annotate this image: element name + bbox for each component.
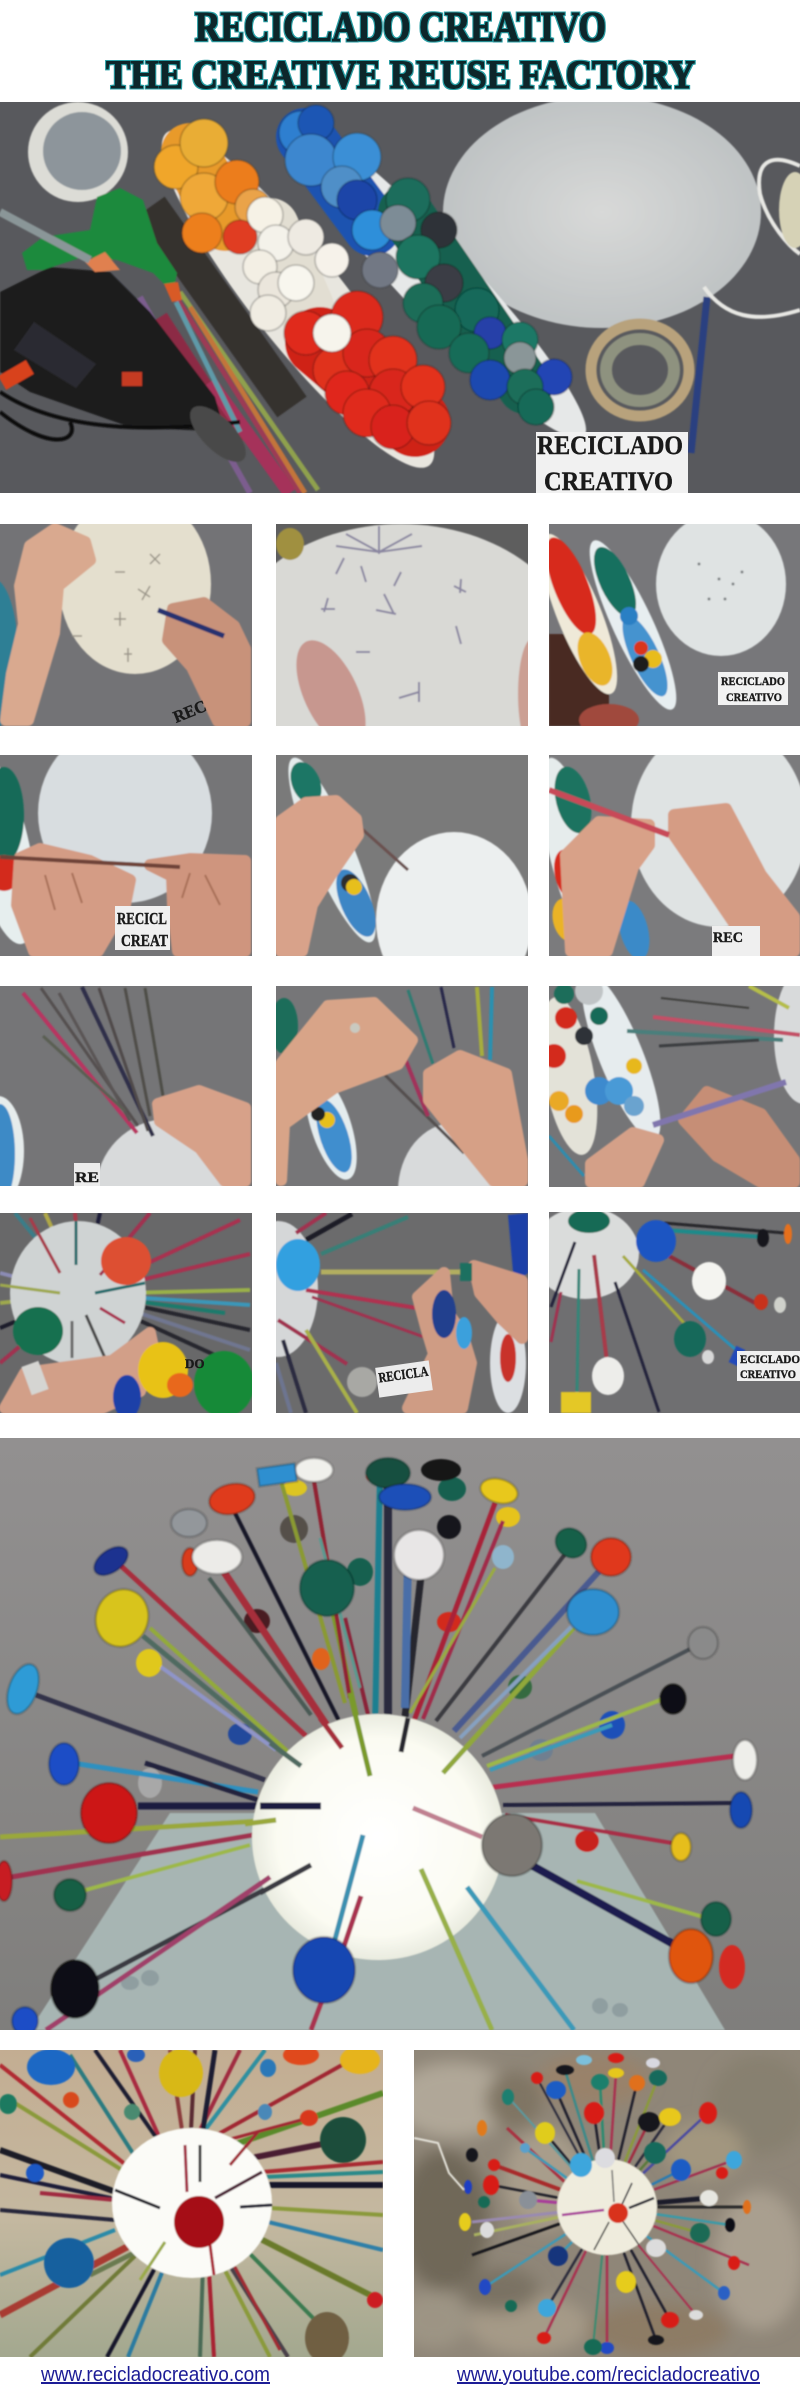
label card: RECICL	[117, 909, 167, 928]
title line 1: RECICLADO CREATIVO	[195, 5, 606, 51]
light blue cap on finger	[456, 1317, 472, 1349]
caps on boat	[0, 767, 24, 891]
skewer	[352, 820, 408, 870]
yellow cap	[276, 528, 304, 560]
label card	[718, 672, 788, 705]
skewers	[0, 2050, 383, 2357]
marked sphere	[59, 494, 211, 674]
blue and green boat	[576, 532, 690, 718]
grey cap	[347, 1367, 377, 1397]
red and yellow boat	[526, 526, 632, 702]
power plug	[779, 172, 800, 248]
boat edge	[0, 750, 49, 950]
dishes with caps	[530, 964, 675, 1159]
sphere with holes	[656, 512, 786, 656]
bottom photo: lamp lit from below	[0, 2050, 383, 2357]
step 1: marking the sphere	[0, 524, 252, 727]
sphere	[398, 1123, 510, 1259]
step 5: inserting skewer	[276, 755, 528, 956]
link: youtube: www.youtube.com/recicladocreativo	[456, 2364, 760, 2386]
blue cap	[636, 1220, 676, 1262]
sphere	[631, 723, 800, 927]
dark skewers	[150, 207, 292, 407]
step 12: caps attached	[549, 1212, 800, 1413]
white cable	[704, 160, 800, 317]
stubs on sphere	[0, 1218, 145, 1358]
label card: REC	[713, 930, 743, 946]
marks on sphere	[72, 554, 160, 662]
skewers on sphere	[115, 2132, 272, 2280]
boat edge	[0, 578, 18, 730]
bottle caps	[0, 1458, 757, 2035]
label card: CREAT	[121, 931, 169, 950]
boat	[527, 752, 655, 962]
boat	[274, 750, 390, 950]
right hand	[684, 1092, 794, 1182]
blue strip top right	[508, 1213, 528, 1283]
sphere	[443, 96, 761, 328]
step 3: pierced sphere	[549, 524, 800, 726]
step 11: hands with caps	[276, 1213, 528, 1413]
label card: RE	[75, 1170, 99, 1186]
title	[106, 5, 695, 97]
boat dish left	[131, 104, 465, 494]
green glue gun	[194, 1351, 254, 1417]
label card: RECICLADO	[721, 674, 785, 688]
drill	[0, 267, 255, 471]
blue cap	[113, 1375, 141, 1419]
skewers	[276, 1213, 464, 1413]
step 8: hands adding skewers	[276, 986, 528, 1186]
green cap on boat	[270, 998, 298, 1054]
step 4: hands threading skewer	[0, 755, 252, 956]
dish at right	[490, 1313, 526, 1413]
cable tube	[0, 212, 90, 260]
photo: materials	[0, 102, 800, 496]
label card	[712, 926, 760, 956]
boat dish right	[258, 95, 610, 461]
table feet	[121, 1970, 628, 2017]
step 7: many skewers inserted	[0, 986, 252, 1186]
label card: RECICLA	[378, 1365, 430, 1386]
caps	[0, 2045, 383, 2364]
label card: RECICLADO	[537, 431, 683, 460]
white sphere	[557, 2159, 657, 2255]
left hand	[17, 849, 130, 951]
sphere	[531, 1207, 639, 1299]
skewers	[0, 1213, 250, 1363]
label: DO	[185, 1356, 204, 1371]
label card	[375, 1360, 433, 1398]
step 2: close-up of marks	[276, 524, 528, 726]
boat	[295, 1067, 367, 1185]
glass table	[30, 1813, 725, 2030]
tape roll	[591, 324, 689, 416]
label card: CREATIVO	[726, 690, 782, 704]
sphere	[38, 723, 212, 903]
label card	[737, 1351, 800, 1381]
red skewer	[549, 790, 669, 835]
small caps	[702, 1224, 792, 1366]
white cap	[692, 1262, 726, 1300]
light blue cap	[276, 1239, 320, 1291]
yellow cap	[561, 1392, 591, 1413]
thumb	[282, 630, 380, 758]
skin at bottom	[579, 704, 639, 736]
ring	[350, 1023, 360, 1033]
finger	[518, 639, 546, 749]
stubs on sphere	[562, 2170, 654, 2250]
right hand	[429, 1056, 522, 1181]
label card	[74, 1163, 100, 1186]
label card	[536, 431, 688, 496]
yellow cap	[138, 1342, 188, 1398]
left hand	[408, 1273, 471, 1408]
stone texture	[394, 2054, 800, 2356]
pencil marks	[321, 526, 466, 702]
finger creases	[45, 873, 220, 910]
pen	[691, 297, 707, 453]
green cap	[568, 1209, 610, 1233]
left hand	[566, 822, 649, 951]
white cap lower	[592, 1357, 624, 1395]
main photo: finished lamp	[0, 1438, 800, 2030]
skewers	[551, 1223, 785, 1412]
step 6: threading red skewer	[549, 755, 800, 956]
bottom photo: lamp on stone	[414, 2050, 800, 2357]
label card	[115, 906, 170, 950]
glue gun	[22, 188, 182, 302]
skewers	[472, 2070, 749, 2348]
hand	[281, 801, 358, 951]
hand	[5, 1333, 153, 1408]
dark blue cap on finger	[432, 1290, 456, 1338]
step 9: skewer with boats	[549, 986, 800, 1187]
sphere	[376, 832, 532, 1008]
red cap	[101, 1237, 151, 1285]
sphere	[10, 1221, 146, 1365]
purple skewer	[653, 1082, 786, 1125]
glowing sphere	[252, 1714, 504, 1960]
coloured skewers	[140, 292, 318, 493]
green cap	[13, 1307, 63, 1355]
sphere surface	[223, 524, 579, 794]
holes	[698, 562, 744, 600]
right hand	[674, 809, 794, 951]
boat edge	[0, 1096, 24, 1206]
pen	[158, 610, 224, 636]
caps	[459, 2053, 751, 2355]
background caps	[136, 1459, 745, 1989]
skewers	[376, 987, 492, 1153]
link: website: www.recicladocreativo.com	[40, 2364, 270, 2386]
skewers	[23, 987, 163, 1136]
left hand	[281, 1003, 412, 1180]
skewers	[0, 1474, 735, 2030]
right hand	[168, 603, 245, 721]
right hand	[150, 859, 245, 951]
label card: CREATIVO	[544, 467, 673, 496]
left hand	[591, 1133, 658, 1182]
skewers in front of sphere	[240, 1693, 520, 1998]
hand	[158, 1091, 245, 1181]
hair at corner	[549, 634, 609, 726]
sphere	[238, 1221, 318, 1357]
skewer	[0, 857, 180, 867]
glowing sphere	[112, 2128, 272, 2278]
cap underlays	[190, 137, 525, 422]
dish of glass beads	[28, 102, 128, 202]
power cable	[414, 2138, 464, 2190]
green cap lower	[674, 1321, 706, 1357]
sphere	[96, 1119, 240, 1263]
bottle caps	[154, 105, 572, 449]
skewers	[549, 986, 800, 1176]
ring	[21, 1361, 49, 1395]
orange cap	[167, 1373, 193, 1397]
green cap on skewer	[460, 1263, 472, 1281]
right hand	[474, 1266, 522, 1338]
step 10: gluing caps	[0, 1213, 252, 1413]
title line 2: THE CREATIVE REUSE FACTORY	[106, 52, 695, 97]
label: REC	[170, 696, 209, 727]
left hand	[6, 529, 90, 720]
sphere edge	[774, 968, 800, 1104]
